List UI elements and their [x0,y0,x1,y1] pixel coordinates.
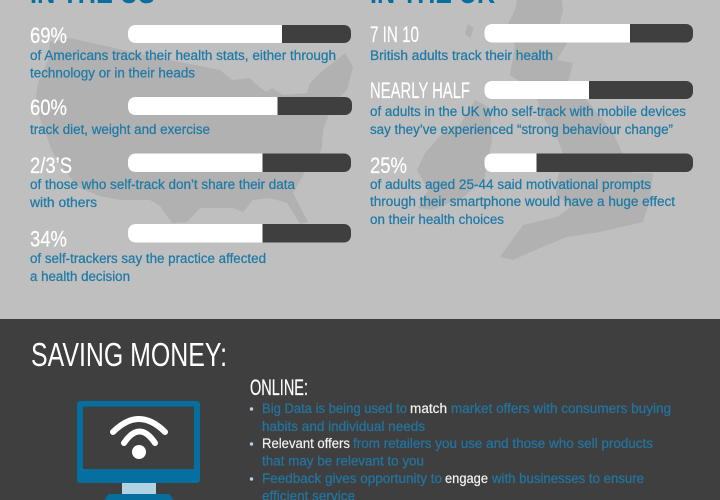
bar: two thirds [128,154,351,172]
map: Great Britain [500,0,653,260]
icon: monitor with wifi symbol [77,401,200,500]
stat: 69 percent: 69% [30,23,67,48]
bullet list: online benefits: engage [445,471,488,486]
stat: 69 percent: of Americans track their health stats, either through [30,48,336,63]
map: Ireland [417,100,492,210]
stat: nearly half: say they’ve experienced “strong behaviour change” [370,122,673,137]
bullet list: online benefits: Relevant offers [262,436,350,451]
bar: 25 percent [484,154,693,172]
stat: 7 in 10: 7 IN 10 [370,22,419,47]
stat: 25 percent: through their smartphone would have a huge effect [370,194,675,209]
stat: 34 percent: of self-trackers say the practice affected [30,251,266,266]
panel: saving money [0,319,720,500]
bullet list: online benefits: with businesses to ensure [491,471,644,486]
stat: two thirds: 2/3’S [30,153,72,178]
heading: saving money: SAVING MONEY: [31,336,227,373]
stat: 25 percent: of adults aged 25-44 said motivational prompts [370,177,651,192]
stat: two thirds [29,153,351,210]
bullet list: online benefits: Big Data is being used to [262,401,407,416]
bullet list: online benefits [250,401,671,500]
subheading: online: ONLINE: [250,375,308,400]
bar: 60 percent [128,97,352,115]
bar: 69 percent [128,25,351,43]
map: United States silhouette [35,38,353,224]
stat: 69 percent [30,23,351,80]
stat: 60 percent [30,95,352,137]
bullet list: online benefits: match [410,401,447,416]
stat: 7 in 10 [370,22,693,63]
stat: two thirds: with others [29,195,97,210]
bullet list: online benefits: that may be relevant to you [262,454,424,468]
stat: 60 percent: track diet, weight and exercise [30,122,210,137]
map: United Kingdom and Ireland silhouette [417,0,653,260]
bullet list: online benefits: habits and individual needs [262,419,425,434]
stat: 25 percent: on their health choices [370,212,504,227]
stat: 7 in 10: British adults track their health [370,48,553,63]
stat: nearly half: of adults in the UK who self-track with mobile devices [370,104,686,119]
bar: 7 in 10 [484,24,693,42]
bullet list: online benefits: market offers with consumers buying [451,401,671,416]
bar: 34 percent [128,224,351,242]
stat: nearly half: NEARLY HALF [370,78,470,103]
stat: 25 percent [370,153,693,227]
icon: wifi signal [113,419,165,459]
bullet list: online benefits: from retailers you use and those who sell products [353,436,653,451]
stat: 25 percent: 25% [370,153,407,178]
bullet list: online benefits: Feedback gives opportunity to [262,471,442,486]
map: Hebrides island [465,24,474,38]
stat: 60 percent: 60% [30,95,67,120]
stat: 69 percent: technology or in their heads [30,66,195,80]
stat: 34 percent: 34% [30,226,67,252]
stat: two thirds: of those who self-track don’t share their data [30,177,295,192]
stat: 34 percent [30,224,351,284]
bar: nearly half [484,81,693,99]
stat: 34 percent: a health decision [30,269,130,284]
panel: self-tracking statistics [0,0,720,319]
stat: nearly half [370,78,693,137]
